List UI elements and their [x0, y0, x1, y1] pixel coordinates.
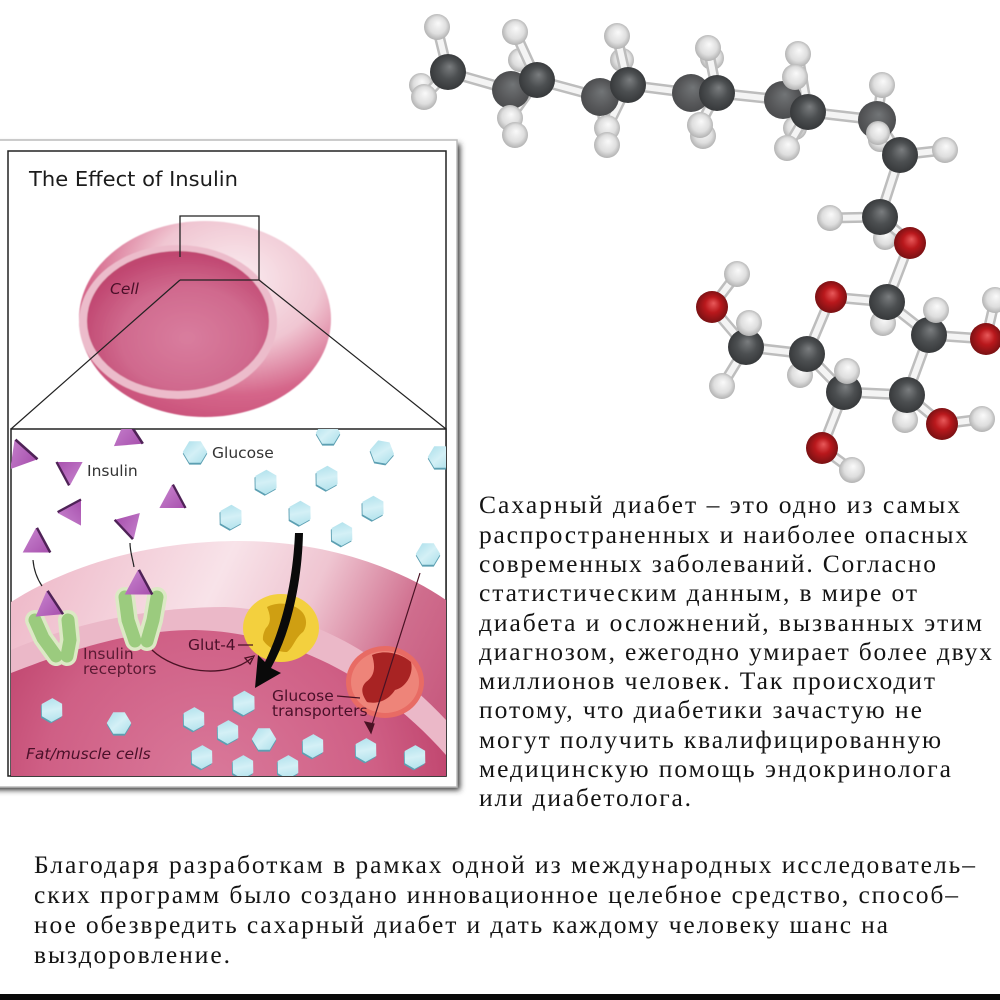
zoom selection box [180, 216, 259, 280]
label: Insulin: Insulin [87, 462, 138, 480]
label: Glut-4: Glut-4 [188, 636, 236, 654]
glucose inside the cell [40, 690, 426, 776]
panel: detail of cell membrane [1, 418, 452, 784]
text block: about diabetes [479, 490, 992, 812]
outer membrane layer [11, 541, 446, 720]
card shadow [0, 144, 460, 790]
arrow: insulin to receptor right [130, 543, 134, 567]
lipid band [11, 607, 446, 755]
molecule carbons [430, 54, 947, 413]
text block: research programme: ное обезвредить сахарный диабет и дать каждому человеку шанс на [34, 910, 888, 939]
insulin receptors [35, 597, 157, 656]
molecule oxygens [696, 227, 1000, 464]
illustration: cell overview [79, 221, 331, 417]
cell interior [87, 251, 269, 391]
text block: about diabetes: диагнозом, ежегодно умирает более двух [479, 637, 992, 666]
text block: about diabetes: распространенных и наиболее опасных [479, 520, 968, 549]
card [0, 140, 457, 787]
text block: about diabetes: современных заболеваний. Согласно [479, 549, 936, 578]
insulin molecules [11, 429, 186, 554]
molecule back carbons [492, 71, 896, 139]
text block: about diabetes: потому, что диабетики зачастую не [479, 695, 922, 724]
molecule bonds [424, 27, 995, 470]
text block: about diabetes: статистическим данным, в мире от [479, 578, 917, 607]
arrow: glucose via transporter [365, 573, 420, 733]
molecule hydrogens [411, 14, 1000, 483]
cell cytoplasm [11, 630, 446, 776]
label: Glucose: Glucose [212, 444, 274, 462]
arrow: glucose entering through Glut-4 [255, 533, 303, 688]
label: Insulin receptors: receptors [83, 660, 156, 678]
text block: about diabetes: или диабетолога. [479, 783, 691, 812]
text block: about diabetes: Сахарный диабет – это одно из самых [479, 490, 960, 519]
label: Glucose transporters: Glucose [272, 687, 334, 705]
arrow: Glut-4 translocation [152, 650, 254, 671]
label: Glucose transporters: transporters [272, 702, 368, 720]
text block: research programme [34, 850, 975, 969]
cell outer body [79, 221, 331, 417]
inner frame [8, 151, 446, 776]
text block: research programme: Благодаря разработкам в рамках одной из международных исследователь– [34, 850, 975, 879]
text block: about diabetes: диабета и осложнений, вызванных этим [479, 608, 982, 637]
cell membrane band [79, 245, 277, 399]
text block: research programme: ских программ было создано инновационное целебное средство, способ– [34, 880, 958, 909]
bottom black bar [0, 994, 1000, 1000]
text block: about diabetes: миллионов человек. Так происходит [479, 666, 935, 695]
text block: research programme: выздоровление. [34, 940, 230, 969]
molecule back hydrogens [409, 46, 918, 433]
label: Fat/muscle cells: Fat/muscle cells [26, 745, 151, 763]
text block: about diabetes: могут получить квалифицированную [479, 725, 941, 754]
label: Insulin receptors: Insulin [83, 645, 134, 663]
arrow: insulin to receptor left [33, 560, 42, 586]
icon: Glut-4 transporter [243, 594, 319, 662]
glucose outside the cell [183, 422, 452, 567]
icon: glucose transporter, red [346, 646, 424, 718]
panel: The Effect of Insulin figure [0, 140, 460, 790]
label: Cell: Cell [110, 280, 140, 298]
text block: about diabetes: медицинскую помощь эндокринолога [479, 754, 951, 783]
detail frame background [11, 429, 446, 776]
figure title: The Effect of Insulin [28, 167, 238, 191]
zoom guide lines [11, 280, 446, 429]
bound insulin on right receptor [125, 570, 152, 594]
molecule: ball and stick model [409, 14, 1000, 483]
connector lines for labels [238, 645, 360, 698]
bound insulin on left receptor [33, 590, 63, 617]
